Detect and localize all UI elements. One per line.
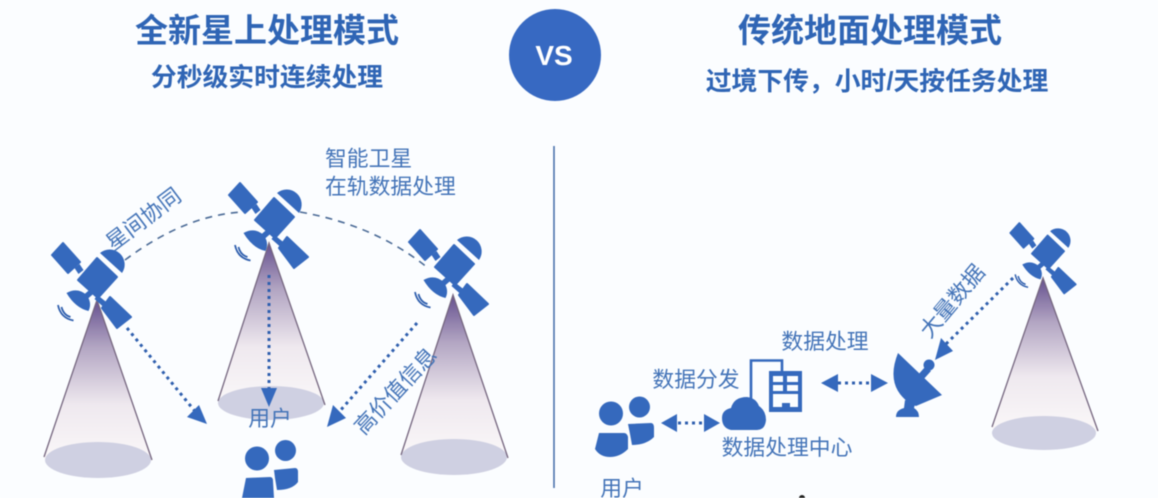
icon: right satellite [409,230,488,315]
label: inter-satellite collaboration: 星间协同 [101,183,186,255]
arrow: right satellite to user [327,323,417,427]
icon: ground-mode satellite [1010,223,1076,294]
icon: left satellite [52,243,131,328]
panel: ground processing [595,223,1098,498]
label: smart satellite: 在轨数据处理 [325,174,456,199]
icon: data center building [751,360,802,412]
label: smart satellite: 智能卫星 [325,146,412,171]
VS badge: VS [535,40,573,71]
arrow: station to data center [821,374,888,392]
icon: partial dark mark at bottom edge [799,495,805,498]
title: left mode: 全新星上处理模式 [135,12,399,49]
label: data processing: 数据处理 [781,329,869,354]
label: smart satellite [325,146,456,199]
title: right mode: 传统地面处理模式 [738,12,1002,49]
panel divider [553,146,555,488]
cone: middle satellite [218,243,325,420]
arrow: satellite to ground station [935,278,1013,360]
icon: middle satellite [229,183,308,268]
arrow: data center to users [661,414,720,432]
label: data distribution: 数据分发 [652,367,740,392]
panel: on-orbit processing [44,146,508,498]
cone: left satellite [44,300,152,478]
label: user: 用户 [248,406,292,431]
icon: ground station dish [893,353,942,417]
icon: cloud [722,397,766,430]
icon: users [595,396,654,457]
subtitle: left mode: 分秒级实时连续处理 [151,63,383,92]
subtitle: right mode: 过境下传，小时/天按任务处理 [706,67,1048,96]
icon: users [242,440,298,498]
cone: right satellite [401,295,508,475]
arrow: left satellite to user [127,328,207,424]
label: data processing center: 数据处理中心 [722,435,853,460]
VS badge [509,9,601,101]
label: high-value information: 高价值信息 [349,343,442,439]
inter-satellite dashed links [125,212,428,268]
label: big data: 大量数据 [915,260,990,343]
arrow: middle satellite to user [261,275,277,407]
cone: ground-mode satellite [992,278,1098,450]
